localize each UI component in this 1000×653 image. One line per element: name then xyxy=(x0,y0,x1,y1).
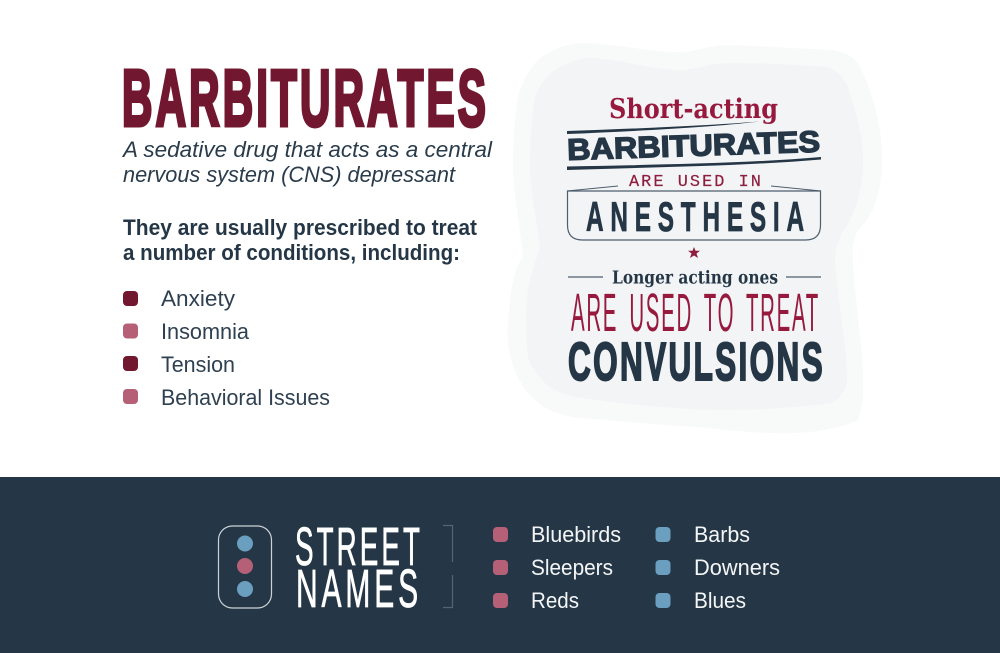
subtitle description xyxy=(121,137,493,187)
subtitle description: nervous system (CNS) depressant xyxy=(123,162,456,187)
conditions heading: a number of conditions, including: xyxy=(123,240,460,265)
street names list: blue: Barbs xyxy=(694,522,750,547)
panel: street names footer xyxy=(0,477,1000,653)
conditions list: Behavioral Issues xyxy=(161,385,330,410)
anesthesia box: ANESTHESIA xyxy=(586,194,804,241)
conditions heading xyxy=(123,215,478,265)
conditions list: Anxiety xyxy=(161,286,235,311)
street names list: red: Sleepers xyxy=(531,555,613,580)
street names list: blue: Blues xyxy=(694,588,746,613)
street names list: blue xyxy=(656,522,780,613)
blob background inner xyxy=(526,58,863,410)
conditions heading: They are usually prescribed to treat xyxy=(123,215,478,240)
convulsions line: CONVULSIONS xyxy=(568,332,825,392)
street names list: red: Bluebirds xyxy=(531,522,621,547)
icon: star xyxy=(688,247,700,258)
conditions list: Tension xyxy=(161,352,235,377)
panel: usage card xyxy=(508,43,882,433)
street names list: red xyxy=(493,522,621,613)
icon: traffic light xyxy=(218,526,272,608)
short-acting heading: Short-acting xyxy=(609,93,778,125)
street names heading: STREET xyxy=(295,517,423,577)
street names list: blue: Downers xyxy=(694,555,780,580)
conditions list xyxy=(123,286,330,410)
are used in label: ARE USED IN xyxy=(629,173,763,192)
panel: introduction xyxy=(121,54,493,410)
blob background outer xyxy=(508,43,882,433)
street names heading: NAMES xyxy=(296,559,422,619)
title: BARBITURATES xyxy=(122,54,489,142)
street names list: red: Reds xyxy=(531,588,579,613)
barbiturates ribbon: BARBITURATES xyxy=(567,126,821,167)
street names heading xyxy=(295,517,423,619)
conditions list: Insomnia xyxy=(161,319,250,344)
longer acting heading: Longer acting ones xyxy=(612,268,778,288)
subtitle description: A sedative drug that acts as a central xyxy=(121,137,493,162)
